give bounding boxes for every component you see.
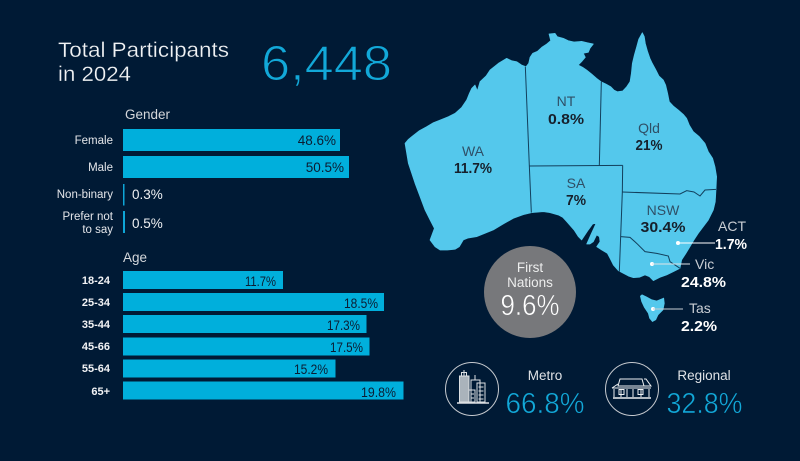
bar: 45-66: 45-66 bbox=[82, 341, 110, 353]
title bbox=[58, 38, 229, 86]
label: NT: 0.8% bbox=[548, 112, 584, 128]
bar: 45-66: 17.5% bbox=[330, 340, 363, 355]
bar: male bbox=[88, 156, 349, 178]
Tasmania bbox=[640, 294, 665, 322]
bar: 55-64: 15.2% bbox=[294, 362, 328, 377]
label: NSW: NSW bbox=[647, 202, 680, 218]
label: SA bbox=[566, 175, 586, 209]
bar: 65+: 19.8% bbox=[361, 385, 396, 400]
bar: 55-64 bbox=[82, 360, 336, 378]
bar: 35-44: 35-44 bbox=[82, 319, 111, 331]
bar: 25-34: 18.5% bbox=[344, 296, 378, 311]
bar: prefer not to say: to say bbox=[82, 224, 113, 236]
callout: ACT bbox=[676, 218, 747, 253]
label: NT: NT bbox=[557, 93, 576, 109]
label: Qld: Qld bbox=[638, 120, 660, 136]
icon: metro city bbox=[446, 362, 498, 416]
bar: non-binary bbox=[57, 184, 163, 206]
label: NSW bbox=[640, 202, 686, 236]
bar: female bbox=[75, 129, 340, 151]
bar: male: Male bbox=[88, 162, 113, 174]
label: Qld bbox=[636, 120, 663, 154]
gender chart bbox=[57, 107, 349, 236]
bar: prefer not to say: 0.5% bbox=[132, 216, 163, 231]
bar: female: 48.6% bbox=[298, 133, 336, 148]
bar: 35-44 bbox=[82, 315, 366, 333]
bar: non-binary: 0.3% bbox=[132, 187, 163, 202]
label: SA: SA bbox=[567, 175, 586, 191]
total participants number: 6,448 bbox=[261, 37, 392, 91]
bar: prefer not to say bbox=[62, 211, 163, 236]
callout: Vic: Vic bbox=[695, 256, 714, 272]
gender heading: Gender bbox=[125, 107, 171, 122]
text: regional bbox=[666, 368, 742, 420]
label: NT bbox=[548, 93, 584, 128]
First Nations circle: Nations bbox=[507, 275, 553, 290]
callout: Tas: 2.2% bbox=[681, 319, 717, 335]
title: Total Participants bbox=[58, 38, 229, 62]
callout: ACT: ACT bbox=[718, 218, 746, 234]
title: in 2024 bbox=[58, 62, 131, 86]
label: WA: 11.7% bbox=[454, 161, 492, 177]
text: regional: Regional bbox=[677, 368, 731, 383]
bar: 18-24: 11.7% bbox=[245, 274, 276, 289]
label: Qld: 21% bbox=[636, 138, 663, 154]
age chart bbox=[82, 250, 404, 400]
bar: prefer not to say: Prefer not bbox=[62, 211, 114, 223]
callout: Vic: 24.8% bbox=[681, 275, 726, 291]
callout: Tas: Tas bbox=[689, 300, 711, 316]
bar: 55-64: 55-64 bbox=[82, 363, 111, 375]
mainland bbox=[405, 33, 717, 281]
text: regional: 32.8% bbox=[666, 388, 742, 420]
bar: female: Female bbox=[75, 135, 113, 147]
label: WA: WA bbox=[462, 143, 485, 159]
bar: 18-24: 18-24 bbox=[82, 275, 111, 287]
callout: Tas bbox=[651, 300, 717, 335]
bar: 35-44: 17.3% bbox=[327, 318, 360, 333]
map of Australia bbox=[405, 33, 717, 322]
icon: regional house bbox=[606, 362, 658, 416]
bar: 45-66 bbox=[82, 338, 370, 356]
label: WA bbox=[454, 143, 492, 177]
callout: Vic bbox=[650, 256, 726, 291]
bar: non-binary: Non-binary bbox=[57, 189, 113, 201]
First Nations circle: First bbox=[517, 260, 543, 275]
text: metro: 66.8% bbox=[506, 388, 584, 420]
bar: male: 50.5% bbox=[306, 160, 344, 175]
bar: 65+ bbox=[91, 382, 404, 400]
label: NSW: 30.4% bbox=[640, 220, 686, 236]
First Nations circle: 9.6% bbox=[500, 290, 560, 322]
bar: 18-24 bbox=[82, 271, 283, 289]
bar: 25-34 bbox=[82, 293, 384, 311]
bar: 65+: 65+ bbox=[91, 386, 110, 398]
callout: ACT: 1.7% bbox=[715, 237, 747, 253]
First Nations circle bbox=[484, 246, 576, 338]
state borders bbox=[525, 67, 716, 272]
label: SA: 7% bbox=[566, 193, 586, 209]
bar: 25-34: 25-34 bbox=[82, 297, 111, 309]
text: metro: Metro bbox=[528, 368, 562, 383]
text: metro bbox=[506, 368, 584, 420]
age heading: Age bbox=[123, 250, 147, 265]
